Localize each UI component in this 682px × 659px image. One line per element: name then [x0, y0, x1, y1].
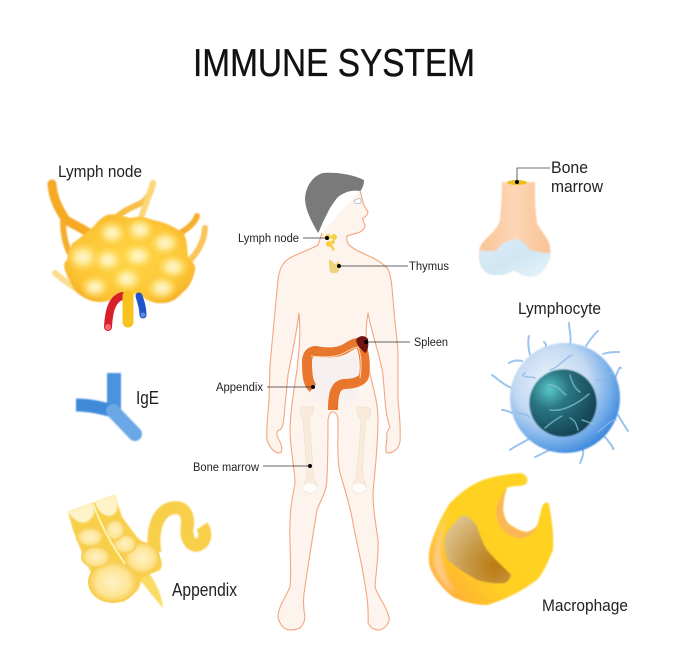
icon: macrophage rim	[496, 488, 538, 538]
icon: body silhouette	[267, 190, 400, 630]
icon: appendix tail	[138, 572, 163, 608]
icon: lymphocyte spikes	[492, 323, 628, 463]
label: bone marrow: Bone	[551, 158, 588, 177]
callout: body lymph node: Lymph node	[238, 233, 299, 245]
callout: body appendix: Appendix	[216, 382, 263, 394]
icon: lymph node follicles	[66, 217, 189, 301]
icon: lymphocyte nucleus	[530, 370, 596, 436]
icon: macrophage left glow	[434, 510, 456, 593]
callout: body bone marrow	[193, 462, 312, 474]
panel: bone marrow	[479, 158, 604, 277]
label: appendix: Appendix	[172, 580, 237, 600]
callout: thymus: Thymus	[409, 261, 449, 273]
icon: blood and lymph vessels below node	[105, 296, 146, 330]
icon: lymph node body	[64, 214, 195, 303]
icon: macrophage cell	[429, 473, 553, 605]
icon: neck lymph node	[325, 234, 337, 251]
icon: eye	[354, 199, 361, 204]
icon: lymphocyte cell body	[510, 343, 620, 453]
icon: appendix haustra	[68, 495, 160, 603]
label: bone marrow: marrow	[551, 177, 604, 196]
panel: appendix	[68, 495, 237, 608]
icon: spleen	[356, 336, 368, 353]
panel: macrophage	[429, 473, 628, 615]
callout: spleen: Spleen	[414, 337, 448, 349]
icon: cell membrane strands	[516, 355, 616, 432]
icon: lymph vessels	[52, 183, 205, 291]
title: IMMUNE SYSTEM	[193, 42, 475, 85]
icon: left femur	[300, 406, 317, 493]
callout: bone marrow pointer	[515, 168, 550, 184]
icon: abdomen	[312, 355, 358, 400]
label: lymph node: Lymph node	[58, 162, 142, 181]
label: lymphocyte: Lymphocyte	[518, 299, 601, 318]
icon: appendix tube	[154, 508, 205, 553]
icon: right femur	[352, 406, 371, 493]
icon: IgE antibody	[76, 373, 135, 434]
icon: femur end	[479, 182, 550, 277]
icon: appendix organ	[68, 495, 162, 602]
callout: body lymph node	[238, 233, 329, 245]
icon: marrow cavity	[507, 180, 527, 185]
callout: thymus	[337, 261, 449, 273]
panel: human body	[267, 173, 400, 630]
panel: lymphocyte	[492, 299, 628, 463]
panel: IgE antibody	[76, 373, 159, 434]
icon: thymus	[329, 260, 340, 273]
label: IgE: IgE	[136, 388, 159, 408]
panel: lymph node	[52, 162, 205, 330]
callout: body appendix	[216, 382, 315, 394]
icon: colon	[307, 343, 365, 410]
label: macrophage: Macrophage	[542, 596, 628, 615]
icon: macrophage nucleus	[445, 515, 511, 583]
callout: spleen	[364, 337, 448, 349]
icon: hair	[305, 173, 364, 233]
icon: nucleus strands	[545, 375, 595, 430]
callout: body bone marrow: Bone marrow	[193, 462, 260, 474]
